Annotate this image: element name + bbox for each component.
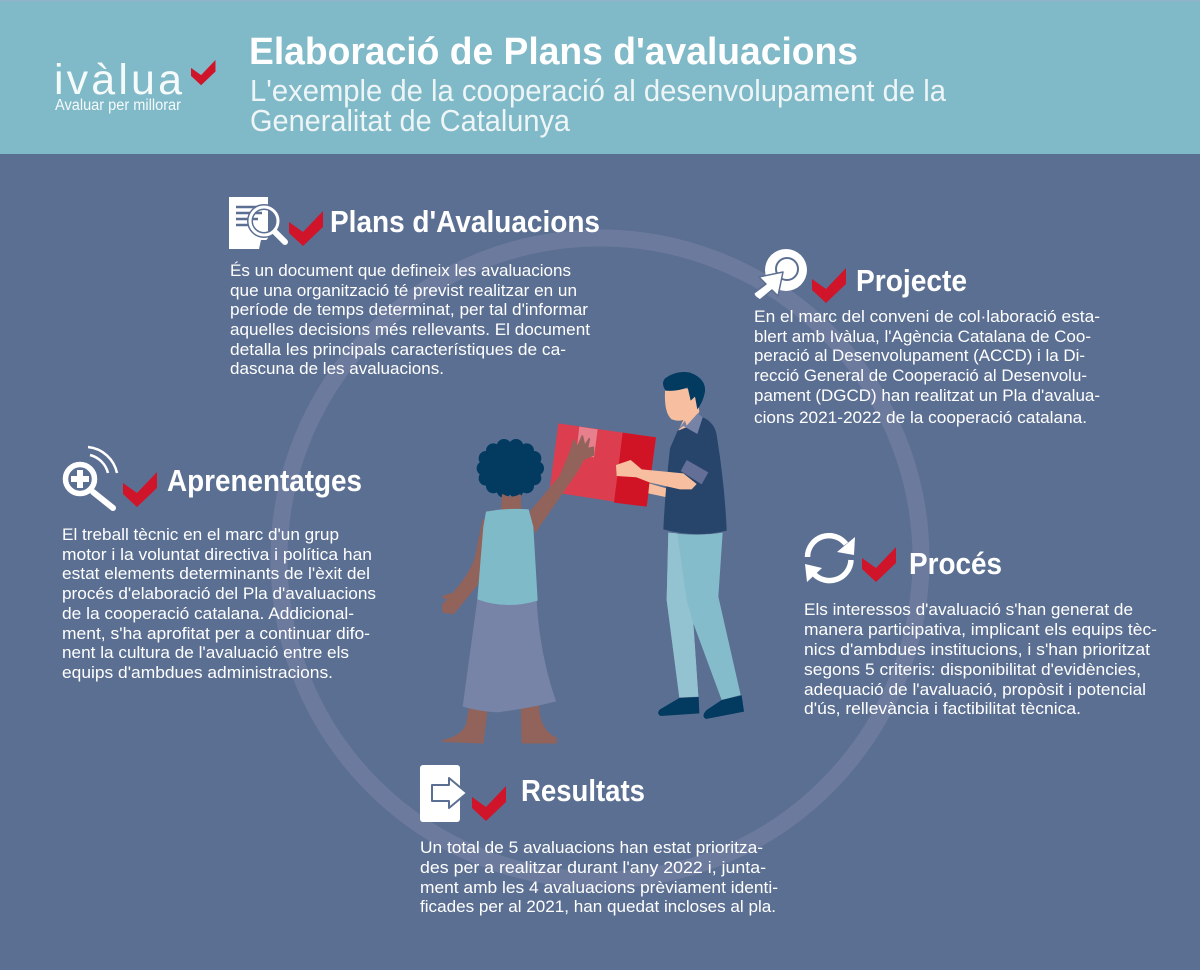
skin [443, 436, 593, 743]
text block: manera participativa, implicant els equips tèc- [804, 620, 1157, 639]
text block: procés d'elaboració del Pla d'avaluacions [62, 584, 376, 603]
logo: ivàlua: ivàlua [54, 56, 182, 104]
hair [663, 372, 705, 409]
icon: refresh arrows [805, 536, 855, 582]
subtitle [250, 74, 946, 138]
text block: ficades per al 2021, han quedat incloses al pla. [420, 897, 776, 916]
text block [754, 307, 1100, 427]
text block: ment, s'ha aprofitat per a continuar difo- [62, 624, 370, 643]
text block: En el marc del conveni de col·laboració esta- [754, 307, 1100, 326]
decorative ring [279, 238, 921, 880]
subtitle: Generalitat de Catalunya [250, 104, 570, 138]
text block: blert amb Ivàlua, l'Agència Catalana de Coo- [754, 327, 1091, 346]
text block: aquelles decisions més rellevants. El document [230, 320, 590, 339]
top [477, 509, 538, 605]
woman [443, 436, 593, 743]
pants [667, 533, 741, 700]
collar [677, 413, 703, 434]
text block: des per a realitzar durant l'any 2022 i, junta- [420, 858, 766, 877]
icon: document with magnifier [229, 197, 285, 249]
panel: Plans d'Avaluacions [229, 197, 600, 378]
icon: red check [862, 547, 896, 582]
text block: que una organització té previst realitzar en un [230, 281, 577, 300]
man [616, 372, 744, 719]
title: Elaboració de Plans d'avaluacions [249, 31, 858, 73]
icon: red check [812, 268, 846, 303]
panel: Aprenentatges [62, 447, 376, 682]
text block: estat elements determinants de l'èxit del [62, 564, 370, 583]
box [549, 423, 656, 507]
shoes [658, 697, 699, 716]
text block [420, 838, 778, 916]
heading: Plans d'Avaluacions [330, 204, 600, 239]
header band [0, 0, 1200, 154]
icon: red check [472, 786, 506, 821]
heading: Projecte [856, 263, 967, 298]
text block: És un document que defineix les avaluacions [230, 261, 571, 280]
text block: motor i la voluntat directiva i política han [62, 545, 372, 564]
logo: ivàlua: Avaluar per millorar [55, 97, 181, 114]
subtitle: L'exemple de la cooperació al desenvolupament de la [250, 74, 946, 108]
text block: detalla les principals característiques de ca- [230, 340, 566, 359]
panel: Resultats [420, 765, 778, 916]
text block: pament (DGCD) han realitzat un Pla d'avalua- [754, 386, 1100, 405]
text block [62, 525, 376, 682]
text block: adequació de l'avaluació, propòsit i potencial [804, 680, 1146, 699]
icon: red check [289, 211, 323, 246]
text block: nics d'ambdues institucions, i s'han prioritzat [804, 640, 1150, 659]
text block [230, 261, 590, 378]
sleeve cuff [681, 460, 708, 484]
text block: Els interessos d'avaluació s'han generat de [804, 600, 1133, 619]
text block: segons 5 criteris: disponibilitat d'evidències, [804, 660, 1141, 679]
text block: Un total de 5 avaluacions han estat prioritza- [420, 838, 763, 857]
logo: ivàlua [54, 56, 215, 114]
text block: ment amb les 4 avaluacions prèviament identi- [420, 878, 778, 897]
text block: de la cooperació catalana. Addicional- [62, 604, 354, 623]
text block: equips d'ambdues administracions. [62, 663, 333, 682]
icon: red check [123, 472, 157, 507]
text block: El treball tècnic en el marc d'un grup [62, 525, 339, 544]
text block: període de temps determinat, per tal d'informar [230, 300, 588, 319]
shirt [663, 417, 727, 534]
skirt [463, 599, 556, 712]
illustration: two people passing a box [443, 372, 744, 743]
text block: dascuna de les avaluacions. [230, 359, 444, 378]
back hand [648, 483, 668, 498]
heading: Resultats [521, 773, 645, 808]
panel: Procés [804, 536, 1157, 718]
text block: cions 2021-2022 de la cooperació catalana. [754, 408, 1087, 427]
text block: recció General de Cooperació al Desenvolu- [754, 366, 1087, 385]
hair [477, 439, 544, 498]
icon: magnifier with plus and signal arcs [66, 447, 117, 508]
heading: Aprenentatges [167, 463, 362, 498]
text block: peració al Desenvolupament (ACCD) i la Di- [754, 346, 1085, 365]
text block [804, 600, 1157, 718]
front arm and hand [616, 460, 697, 489]
text block: nent la cultura de l'avaluació entre els [62, 643, 349, 662]
text block: d'ús, rellevància i factibilitat tècnica. [804, 699, 1081, 718]
icon: target with cursor arrow [754, 249, 807, 300]
panel: Projecte [754, 249, 1100, 427]
heading: Procés [909, 546, 1002, 581]
neck and face [665, 388, 699, 431]
icon: door with arrow [420, 765, 467, 822]
